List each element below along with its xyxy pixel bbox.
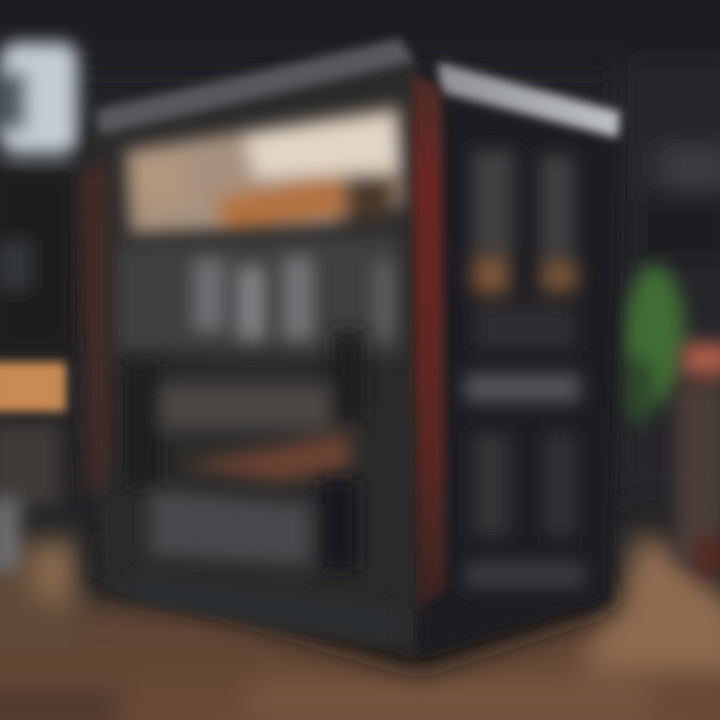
upper window: warm cream light <box>125 105 405 235</box>
cabinet: left red post <box>80 165 110 500</box>
lower shelves: brown band <box>125 330 364 485</box>
left background: orange shelf <box>0 362 66 412</box>
cabinet: right red corner post <box>412 72 446 608</box>
cabinet: shadow base <box>95 530 618 670</box>
left background: bright window panel <box>0 42 78 353</box>
floor: warm brown surface <box>0 530 720 720</box>
cabinet: left face <box>88 60 420 655</box>
right background: green plant <box>624 265 685 425</box>
cabinet: right face <box>420 60 622 655</box>
cabinet: top edge left <box>95 38 415 135</box>
cabinet: top edge right <box>438 62 620 138</box>
background: dark upper wall <box>0 0 720 500</box>
left background: lower stand <box>0 425 60 570</box>
middle shelves: grey bottles <box>115 235 400 355</box>
cabinet <box>80 38 622 670</box>
right face: window columns <box>465 150 585 588</box>
right background: red object <box>676 342 720 575</box>
bottom drawer: dark grey <box>130 480 400 640</box>
